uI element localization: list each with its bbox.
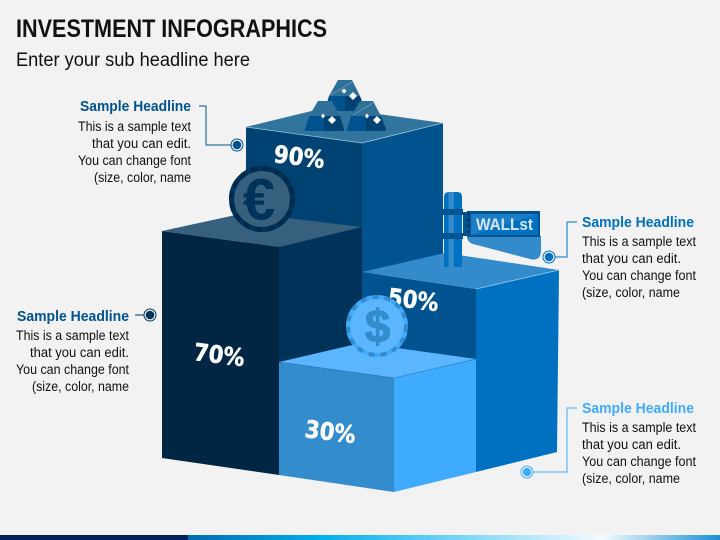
- callout: right: You can change font: [582, 268, 696, 283]
- title: INVESTMENT INFOGRAPHICS: [16, 15, 327, 43]
- footer bar: [0, 535, 720, 540]
- subtitle: Enter your sub headline here: [16, 50, 250, 71]
- callout: top left: You can change font: [78, 153, 191, 168]
- callout: left: [16, 308, 156, 394]
- callout: right: Sample Headline: [582, 214, 694, 231]
- icon: dollar coin: [348, 297, 406, 355]
- callout: lower right: This is a sample text: [582, 420, 696, 435]
- callout: left: This is a sample text: [16, 328, 129, 343]
- icon: gold bars: [305, 80, 386, 131]
- callout: top left: (size, color, name: [94, 170, 191, 185]
- icon: Wall St sign: [443, 192, 541, 267]
- block: 70%: [162, 213, 362, 475]
- callout: right: that you can edit.: [582, 251, 681, 266]
- block: 50%: [362, 253, 559, 472]
- label: 30%: 30%: [303, 415, 357, 449]
- callout: lower right: Sample Headline: [582, 400, 694, 417]
- sign text: WALLst: [476, 215, 533, 234]
- callout: top left: This is a sample text: [78, 119, 191, 134]
- block: 30%: [279, 343, 476, 492]
- callout: left: (size, color, name: [32, 379, 129, 394]
- icon: euro coin: €: [243, 168, 275, 232]
- callout: top left: that you can edit.: [92, 136, 191, 151]
- icon: euro coin: [232, 168, 292, 232]
- icon: dollar coin: $: [365, 300, 390, 352]
- sign pole: [444, 192, 462, 267]
- callout: lower right: that you can edit.: [582, 437, 681, 452]
- callout: top left: Sample Headline: [80, 98, 191, 115]
- callout: left: Sample Headline: [17, 308, 129, 325]
- block: 90%: [246, 107, 443, 280]
- callout: lower right: (size, color, name: [582, 471, 680, 486]
- label: 90%: 90%: [272, 140, 326, 174]
- callout: lower right: [521, 400, 696, 486]
- callout: lower right: You can change font: [582, 454, 696, 469]
- label: 50%: 50%: [386, 283, 440, 317]
- callout: left: You can change font: [16, 362, 129, 377]
- sign shadow: [467, 236, 541, 260]
- callout: top left: [78, 98, 243, 185]
- label: 70%: 70%: [192, 338, 246, 372]
- callout: right: [543, 214, 696, 300]
- callout: right: (size, color, name: [582, 285, 680, 300]
- callout: right: This is a sample text: [582, 234, 696, 249]
- callout: left: that you can edit.: [30, 345, 129, 360]
